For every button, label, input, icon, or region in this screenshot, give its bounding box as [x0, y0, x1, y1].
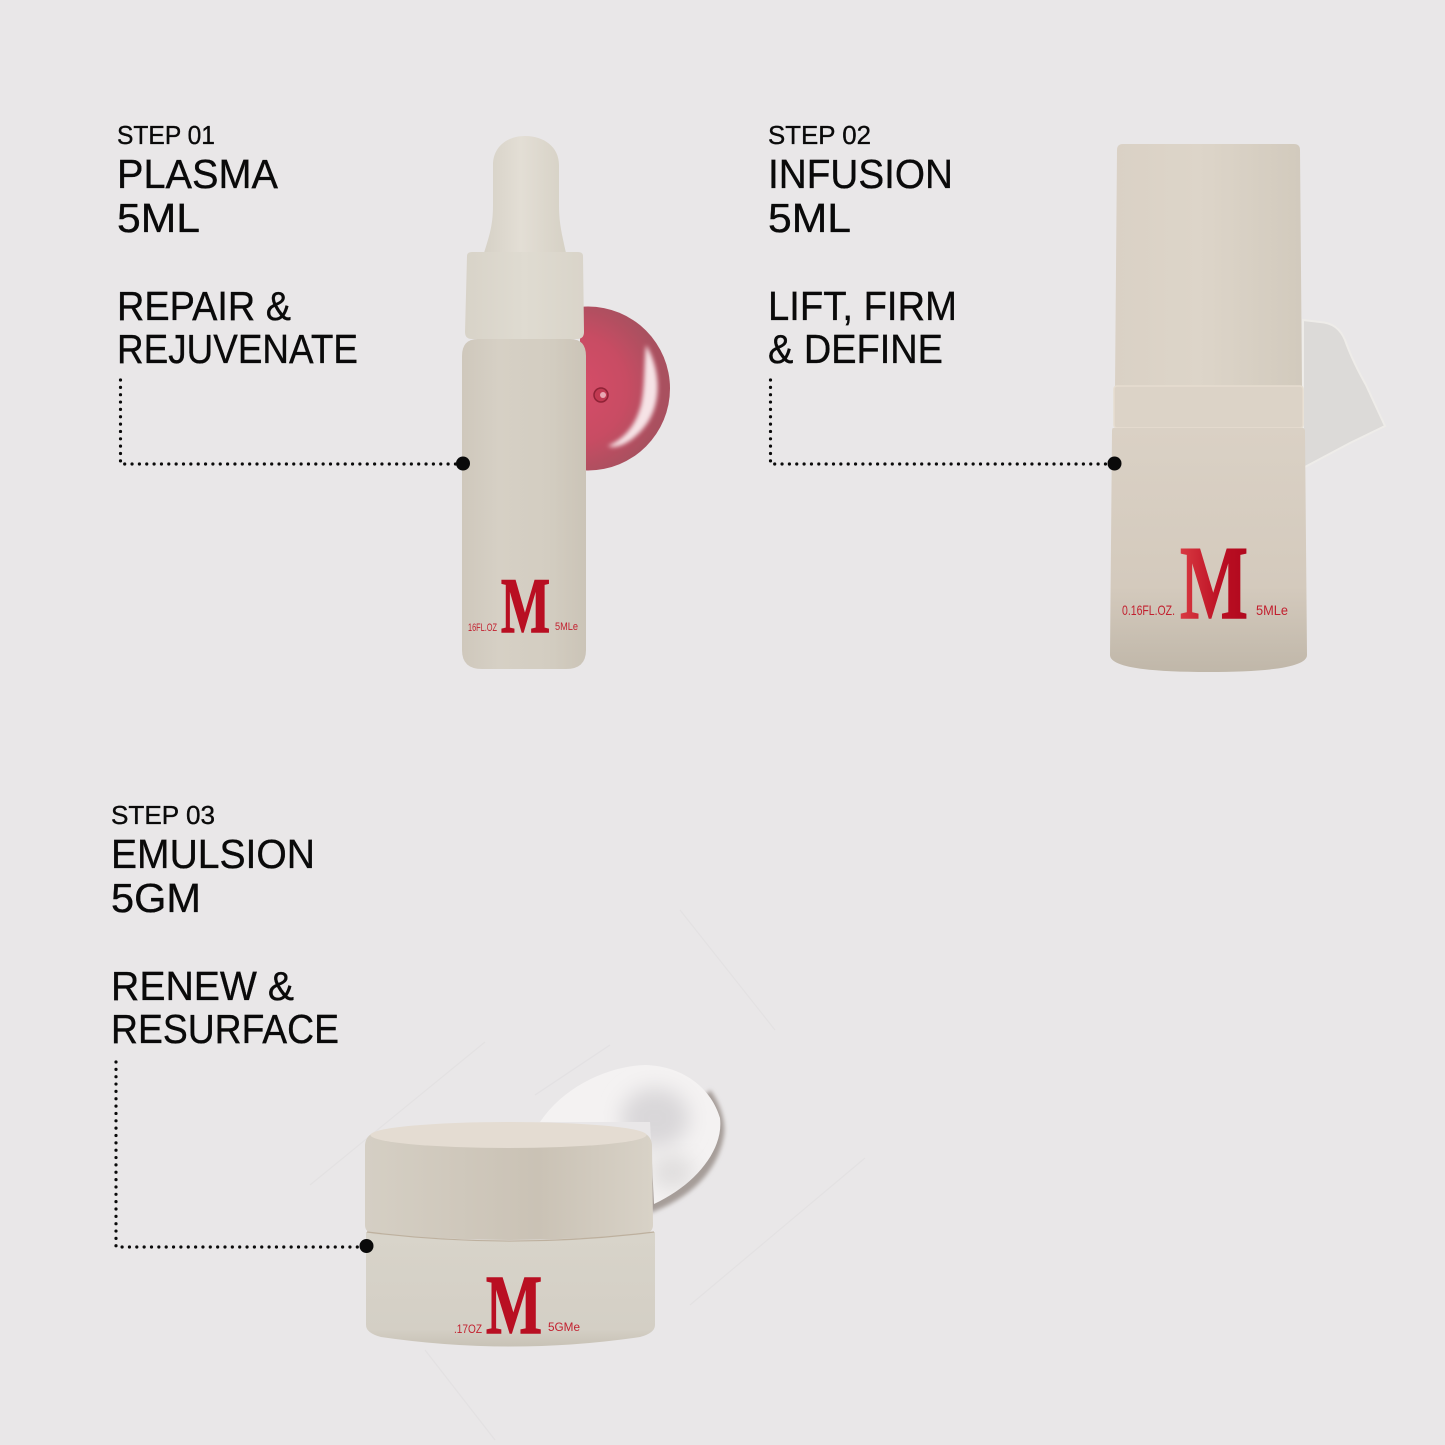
- step 01 dotted leader: [120, 380, 470, 470]
- white balm swatch: [1303, 320, 1385, 468]
- step 01 text block: PLASMA: [117, 151, 279, 197]
- red plasma droplet: [580, 306, 670, 470]
- logo and volume labels: [454, 1259, 580, 1352]
- faint background streaks: [310, 910, 865, 1440]
- logo and volume labels: [1122, 524, 1288, 641]
- step 03 dotted leader: [116, 1062, 374, 1253]
- jar lid top: [370, 1122, 646, 1148]
- step 01 text block: REJUVENATE: [117, 326, 358, 372]
- step 02 text block: 5ML: [768, 195, 851, 241]
- logo and volume labels: 16FL.OZ: [468, 622, 497, 634]
- bottle body: [462, 339, 586, 669]
- step 01 text block: 5ML: [117, 195, 200, 241]
- step 02 text block: & DEFINE: [768, 326, 943, 372]
- cream swatch shadow: [640, 1090, 724, 1213]
- dropper bulb: [484, 136, 566, 253]
- logo and volume labels: M: [486, 1259, 542, 1352]
- step 03 text block: STEP 03: [111, 800, 215, 830]
- step 01 text block: REPAIR &: [117, 283, 291, 329]
- step 03 text block: EMULSION: [111, 831, 315, 877]
- step 03 text block: 5GM: [111, 875, 201, 921]
- stick cap: [1115, 144, 1302, 388]
- step 03 text block: [111, 800, 339, 1052]
- product: infusion stick: [1110, 144, 1385, 672]
- step 01 text block: STEP 01: [117, 120, 215, 150]
- jar seam: [367, 1232, 654, 1241]
- product: emulsion jar: [365, 1060, 730, 1352]
- cream swatch: [540, 1065, 720, 1204]
- step 03 text block: RESURFACE: [111, 1006, 339, 1052]
- step 02 text block: STEP 02: [768, 120, 871, 150]
- logo and volume labels: 5MLe: [555, 621, 578, 633]
- step 02 text block: INFUSION: [768, 151, 953, 197]
- jar base: [366, 1232, 655, 1346]
- logo and volume labels: 0.16FL.OZ.: [1122, 602, 1175, 618]
- step 01 text block: [117, 120, 358, 372]
- logo and volume labels: 5GMe: [548, 1320, 580, 1334]
- product: plasma dropper bottle: [462, 136, 670, 669]
- step 02 text block: [768, 120, 957, 372]
- dropper collar: [465, 252, 584, 339]
- logo and volume labels: .17OZ: [454, 1322, 482, 1336]
- logo and volume labels: M: [1180, 524, 1248, 641]
- logo and volume labels: [468, 562, 578, 649]
- step 02 text block: LIFT, FIRM: [768, 283, 957, 329]
- step 03 text block: RENEW &: [111, 963, 294, 1009]
- stick band: [1114, 386, 1303, 428]
- logo and volume labels: M: [501, 562, 550, 649]
- logo and volume labels: 5MLe: [1256, 602, 1288, 618]
- jar lid side: [365, 1132, 653, 1240]
- stick body: [1110, 428, 1307, 672]
- step 02 dotted leader: [770, 380, 1122, 470]
